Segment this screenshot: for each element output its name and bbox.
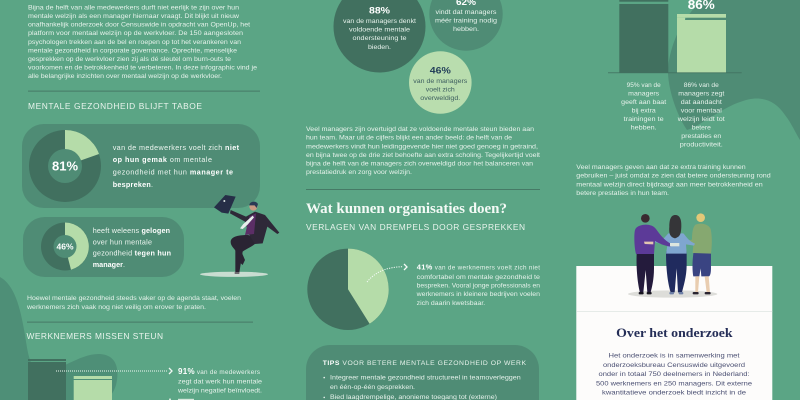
bubble: 88%: van de managers denkt [343,18,416,25]
person: middle [653,215,695,294]
caption: 95%: trainingen te [624,116,664,123]
illustration: three people [628,213,717,298]
card: over het onderzoek [576,266,772,400]
card text: Het onderzoek is in samenwerking met [608,352,740,360]
bubble: 46%: overweldigd. [420,95,461,102]
bubble: 62%: hebben. [453,26,479,33]
text: managers: hun team. Maar uit de cijfers blijkt een ander beeld: de helft van de [306,134,513,142]
text 46%: manager. [93,260,125,269]
text 81%: van de medewerkers voelt zich niet [113,143,240,152]
text: mental health on agenda [26,295,242,311]
text: 41% [416,262,541,307]
card text: onder in totaal 750 deelnemers in Nederland: [598,371,750,378]
bubble: 62%: vindt dat managers [436,9,496,16]
caption: 86%: productiviteit. [680,142,723,148]
bubble: 88%: ondersteuning te [352,35,407,42]
bubble: 46% [409,51,472,114]
pie chart: 41% [307,249,389,330]
donut chart 81% [29,130,101,202]
text 46% [93,226,171,269]
text: extra training: gebruiken – juist omdat ze zien dat betere ondersteuning rond [576,172,771,180]
intro text: onafhankelijk onderzoek door Censuswide in opdracht van OpenUp, het [28,22,250,28]
intro text: voorkomen en de betrokkenheid te verbeteren. In deze infographic vind je [28,64,258,71]
bubble: 88%: bieden. [368,44,391,51]
heading: wat kunnen organisaties doen: Wat kunnen organisaties doen? [306,201,507,217]
intro text: mentale welzijn als een manager hiernaar vraagt. Dit blijkt uit nieuw [28,13,240,20]
tips list: en één-op-één gesprekken. [330,384,415,391]
caption: 95%: hebben. [631,124,657,132]
arrow: 41% [367,264,407,282]
text: 91%: welzijn negatief beïnvloedt. [177,387,262,394]
subheading: verlagen van drempels: VERLAGEN VAN DREMPELS DOOR GESPREKKEN [306,222,525,232]
text: extra training: Veel managers geven aan dat ze extra training kunnen [576,164,746,171]
bubble: 46%: van de managers [413,78,467,85]
tips heading: TIPS VOOR BETERE MENTALE GEZONDHEID OP WERK [323,360,526,367]
tips list: Integreer mentale gezondheid structureel in teamoverleggen [330,375,521,382]
intro text: Bijna de helft van alle medewerkers durft niet eerlijk te zijn over hun [28,4,240,12]
text: managers [306,126,540,176]
card text: onderzoeksbureau Censuswide uitgevoerd [603,362,746,369]
person: left [634,214,672,294]
bubble: 62% [429,0,503,51]
bubble: 88%: voldoende mentale [349,26,411,34]
text: managers: bijna de helft van de managers zich overweldigd door het balanceren van [306,160,534,168]
caption: 95%: geeft aan baat [621,99,666,106]
intro text: psychologen trekken aan de bel en roepen op tot het verankeren van [28,39,242,46]
intro text [28,4,258,80]
intro text: platform voor mentaal welzijn op de werkvloer. De 150 aangesloten [28,30,244,37]
text: mental health on agenda: werknemers zich vaak nog niet veilig om erover te praten. [26,304,206,311]
caption: 86%: managers zegt [678,90,725,98]
card text: kwantitatieve onderzoek biedt inzicht in de [602,390,747,396]
caption: 86%: 86% van de [684,82,719,89]
bar chart: employees [28,359,112,400]
bubble: 88%: 88% [369,6,391,17]
caption: 95%: 95% van de [627,82,661,89]
text: 41%: bespreken. Vooral jonge professionals en [417,282,541,290]
panel: 81% [22,124,260,208]
donut chart 46% [41,222,89,270]
heading: mentale gezondheid blijft taboe: MENTALE GEZONDHEID BLIJFT TABOE [28,101,202,111]
panel: 46% [23,217,184,277]
caption: 86%: welzijn leidt tot [677,116,725,123]
text 81%: bespreken. [113,180,153,189]
text 46%: gezondheid tegen hun [93,249,171,258]
text: 41%: werknemers in kleinere bedrijven voelen [416,291,541,298]
text: extra training: betere prestaties in hun team. [576,190,669,197]
tips list [323,375,521,400]
text 81%: gezondheid met hun manager te [113,168,233,176]
bubble: 88% [334,0,426,72]
card text: 500 werknemers en 250 managers. Dit externe [596,380,753,387]
text: 91% [177,367,263,394]
bubble: 46%: 46% [430,65,451,76]
bar chart: managers [608,0,742,73]
caption: 86%: prestaties en [681,133,722,140]
person: right [677,213,712,294]
text: 41%: 41% van de werknemers voelt zich niet [417,262,540,272]
value 81%: 81% [52,158,78,174]
intro text: gesprekken op de werkvloer zien zij als dé sleutel om burn-outs te [28,56,232,63]
text 81%: op hun gemak om mentale [113,155,212,164]
background blob: upper right [668,0,800,140]
bubble: 46%: voelt zich [426,86,455,94]
illustration: businessman with briefcase [200,195,279,277]
card text [596,352,753,396]
text: 41%: comfortabel om mentale gezondheid te [417,274,541,281]
caption: 95%: bij extra [632,108,656,114]
text: managers: medewerkers vindt hun leidinggevende hier niet goed genoeg in getraind, [306,143,538,150]
caption: 95%: managers [628,90,659,98]
text 81% [113,143,240,189]
text: managers: prestatiedruk en zorg voor welzijn. [306,169,412,176]
text: extra training [576,164,771,197]
caption: 86%: betere [692,124,711,132]
caption: 86% [677,82,725,148]
panel: tips [306,345,539,400]
text: managers: Veel managers zijn overtuigd dat ze voldoende mentale steun bieden aan [306,126,535,133]
text 46%: over hun mentale [93,238,152,246]
arrow: 91% [56,368,172,374]
caption: 95% [621,82,666,132]
heading: werknemers missen steun: WERKNEMERS MISSEN STEUN [26,331,163,341]
background blob: lower left [0,277,117,400]
intro text: mentale gezondheid in corporate governance. Oprechte, menselijke [28,47,238,54]
text: 91%: zegt dat werk hun mentale [178,378,263,385]
value 46%: 46% [56,242,74,252]
text: mental health on agenda: Hoewel mentale gezondheid steeds vaker op de agenda staat, voelen [27,295,242,302]
text: 41%: zich daarin kwetsbaar. [417,300,485,307]
bubble: 62%: méér training nodig [435,18,498,24]
text: 91%: 91% van de medewerkers [178,367,260,376]
text 46%: heeft weleens gelogen [93,226,170,235]
text: extra training: mentaal welzijn direct bijdraagt aan meer betrokkenheid en [576,181,763,188]
caption: 86%: dat aandacht [681,99,722,106]
text: managers: en bijna twee op de drie ziet behoefte aan extra scholing. Tegelijkertijd voelt [306,152,540,159]
caption: 86%: voor mentaal [681,108,722,114]
card title: Over het onderzoek [616,325,733,340]
intro text: alle belangrijke inzichten over mentaal welzijn op de werkvloer. [28,73,222,80]
